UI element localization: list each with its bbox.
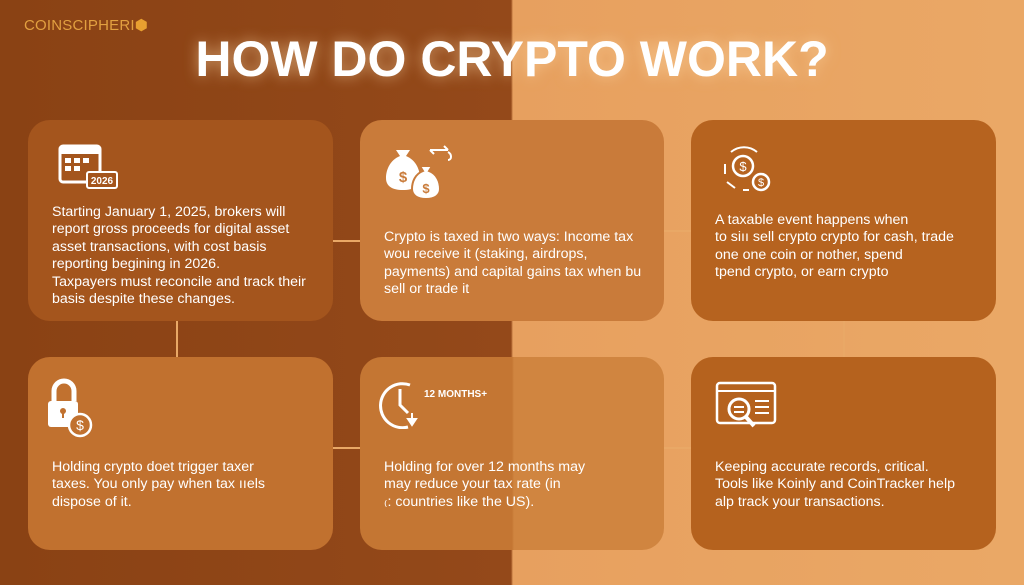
- text: sell or trade it: [384, 281, 469, 297]
- panel: records: [691, 357, 996, 550]
- panel: broker reporting: [28, 120, 333, 321]
- text: Starting January 1, 2025, brokers will: [52, 204, 285, 220]
- text: one one coin or nother, spend: [715, 247, 903, 263]
- text: [384, 459, 585, 510]
- logo: COINSCIPHERI⬢: [24, 17, 148, 34]
- icon: calendar: 2026: [91, 176, 114, 187]
- panel: holding: [28, 357, 333, 550]
- text: A taxable event happens when: [715, 212, 908, 228]
- text: Taxpayers must reconcile and track their: [52, 274, 306, 290]
- text: [52, 459, 265, 510]
- icon: money bags: $: [422, 181, 430, 196]
- icon: cycle coins: [724, 146, 770, 192]
- text: reporting begining in 2026.: [52, 256, 220, 272]
- icon: lock with dollar: [48, 378, 92, 438]
- text: tpend crypto, or earn crypto: [715, 264, 888, 280]
- text: Holding for over 12 months may: [384, 459, 585, 475]
- panel: taxed two ways: [360, 120, 664, 321]
- icon: money bags: [386, 145, 452, 198]
- text: [384, 229, 641, 297]
- panel: 12 months: [360, 357, 664, 550]
- text: wou receive it (staking, airdrops,: [384, 246, 587, 262]
- icon: calendar: [58, 144, 118, 189]
- text: Crypto is taxed in two ways: Income tax: [384, 229, 633, 245]
- text: report gross proceeds for digital asset: [52, 221, 289, 237]
- text: taxes. You only pay when tax ııels: [52, 476, 265, 492]
- panel: taxable event: [691, 120, 996, 321]
- text: to siıı sell crypto crypto for cash, trade: [715, 229, 954, 245]
- text: [52, 204, 306, 307]
- icon: document magnifier: [716, 382, 776, 428]
- text: [715, 212, 954, 280]
- text: may reduce your tax rate (in: [384, 476, 561, 492]
- icon: lock with dollar: $: [76, 417, 84, 433]
- text: Holding crypto doet trigger taxer: [52, 459, 254, 475]
- icon: cycle coins: $: [739, 159, 747, 174]
- icon: clock 12 months: [379, 382, 487, 429]
- text: [715, 459, 955, 510]
- text: Tools like Koinly and CoinTracker help: [715, 476, 955, 492]
- text: alp track your transactions.: [715, 494, 885, 510]
- icon: clock 12 months: 12 MONTHS+: [424, 389, 487, 400]
- text: asset transactions, with cost basis: [52, 239, 266, 255]
- text: ₍: countries like the US).: [384, 494, 534, 510]
- icon: cycle coins: $: [758, 177, 764, 189]
- text: basis despite these changes.: [52, 291, 235, 307]
- connectors: [333, 240, 360, 242]
- text: Keeping accurate records, critical.: [715, 459, 929, 475]
- text: dispose of it.: [52, 494, 132, 510]
- icon: money bags: $: [399, 169, 408, 186]
- title: HOW DO CRYPTO WORK?: [195, 31, 829, 87]
- text: payments) and capital gains tax when bu: [384, 264, 641, 280]
